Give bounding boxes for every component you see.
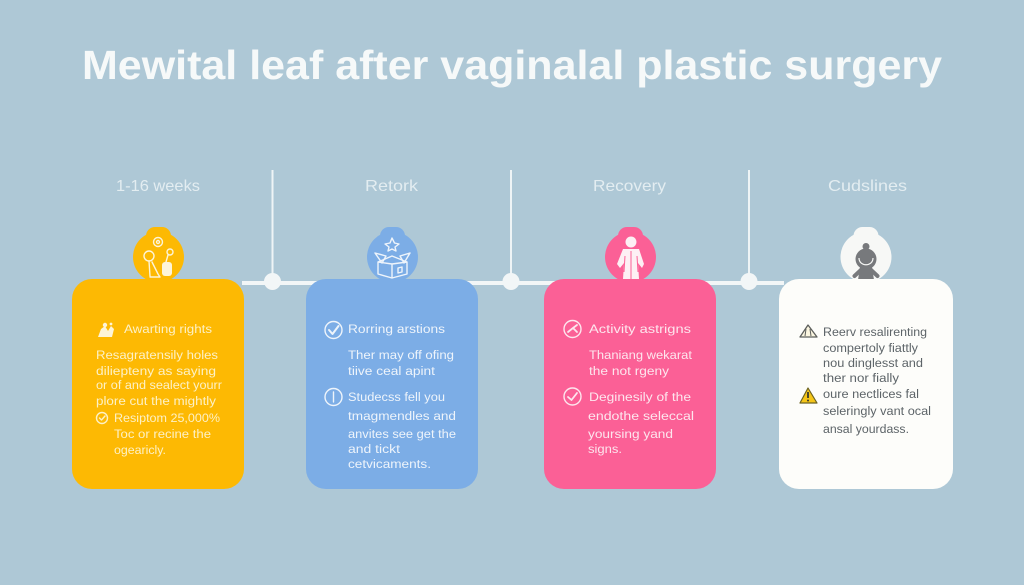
text: first paragraph: Thaniang wekarat (589, 348, 693, 362)
heading: Cudslines: Cudslines (828, 178, 907, 195)
text: second paragraph: seleringly vant ocal (823, 404, 931, 418)
icon: yellow warning (800, 388, 817, 403)
text: second paragraph: cetvicaments. (348, 457, 431, 471)
text: first paragraph: the not rgeny (589, 364, 670, 378)
text: card heading: Awarting rights (124, 322, 212, 336)
text: card heading: Activity astrigns (589, 322, 691, 336)
text: second paragraph: yoursing yand (588, 427, 673, 441)
text: first paragraph (348, 348, 454, 378)
text: second paragraph: oure nectlices fal (823, 387, 919, 401)
text: first paragraph: ther nor fially (823, 371, 900, 385)
icon: blue badge (367, 227, 418, 282)
text: second paragraph: and tickt (348, 442, 401, 456)
text: second paragraph (823, 387, 931, 436)
text: second paragraph: Studecss fell you (348, 390, 445, 404)
icon: pink badge (605, 227, 656, 282)
text: check item: ogearicly. (114, 443, 166, 457)
panel: Retork (306, 178, 478, 489)
text: check item (114, 411, 220, 457)
text: second paragraph: anvites see get the (348, 427, 456, 441)
title: Mewital leaf after vaginalal plastic surgery (82, 42, 942, 88)
icon: check (96, 412, 108, 424)
timeline (242, 170, 784, 290)
text: second paragraph (588, 390, 694, 456)
text: first paragraph: Ther may off ofing (348, 348, 454, 362)
heading: Recovery: Recovery (593, 178, 666, 195)
text: check item: Resiptom 25,000% (114, 411, 220, 425)
text: second paragraph: Deginesily of the (589, 390, 691, 404)
text: second paragraph: signs. (588, 442, 622, 456)
text: first paragraph: tiive ceal apint (348, 364, 436, 378)
icon: activity (564, 320, 581, 338)
text: card paragraph: plore cut the mightly (96, 394, 217, 408)
icon: outline warning (800, 325, 817, 337)
text: first paragraph: nou dinglesst and (823, 356, 923, 370)
icon: info (325, 388, 342, 406)
panel: Recovery (544, 178, 716, 489)
card: blue (306, 279, 478, 489)
text: second paragraph: tmagmendles and (348, 409, 456, 423)
text: card paragraph: Resagratensily holes (96, 348, 218, 362)
text: first paragraph (823, 325, 927, 385)
text: card heading: Rorring arstions (348, 322, 445, 336)
text: first paragraph (589, 348, 693, 378)
text: first paragraph: compertoly fiattly (823, 341, 919, 355)
heading: 1-16 weeks: 1-16 weeks (116, 178, 200, 195)
text: second paragraph: ansal yourdass. (823, 422, 909, 436)
icon: check (564, 388, 581, 405)
panel: 1-16 weeks (72, 178, 244, 489)
card: pink (544, 279, 716, 489)
icon: white badge (840, 227, 892, 282)
card: yellow (72, 279, 244, 489)
text: card paragraph (96, 348, 222, 408)
text: card paragraph: diliepteny as saying (96, 364, 216, 378)
card: white (779, 279, 953, 489)
text: card paragraph: or of and sealect yourr (96, 378, 222, 392)
panel: Cudslines (779, 178, 953, 489)
heading: Retork: Retork (365, 178, 419, 195)
icon: yellow badge (133, 227, 184, 282)
icon: people (98, 323, 114, 337)
text: second paragraph (348, 390, 456, 471)
text: first paragraph: Reerv resalirenting (823, 325, 927, 339)
text: check item: Toc or recine the (114, 427, 211, 441)
icon: check (325, 322, 342, 338)
text: second paragraph: endothe seleccal (588, 409, 694, 423)
